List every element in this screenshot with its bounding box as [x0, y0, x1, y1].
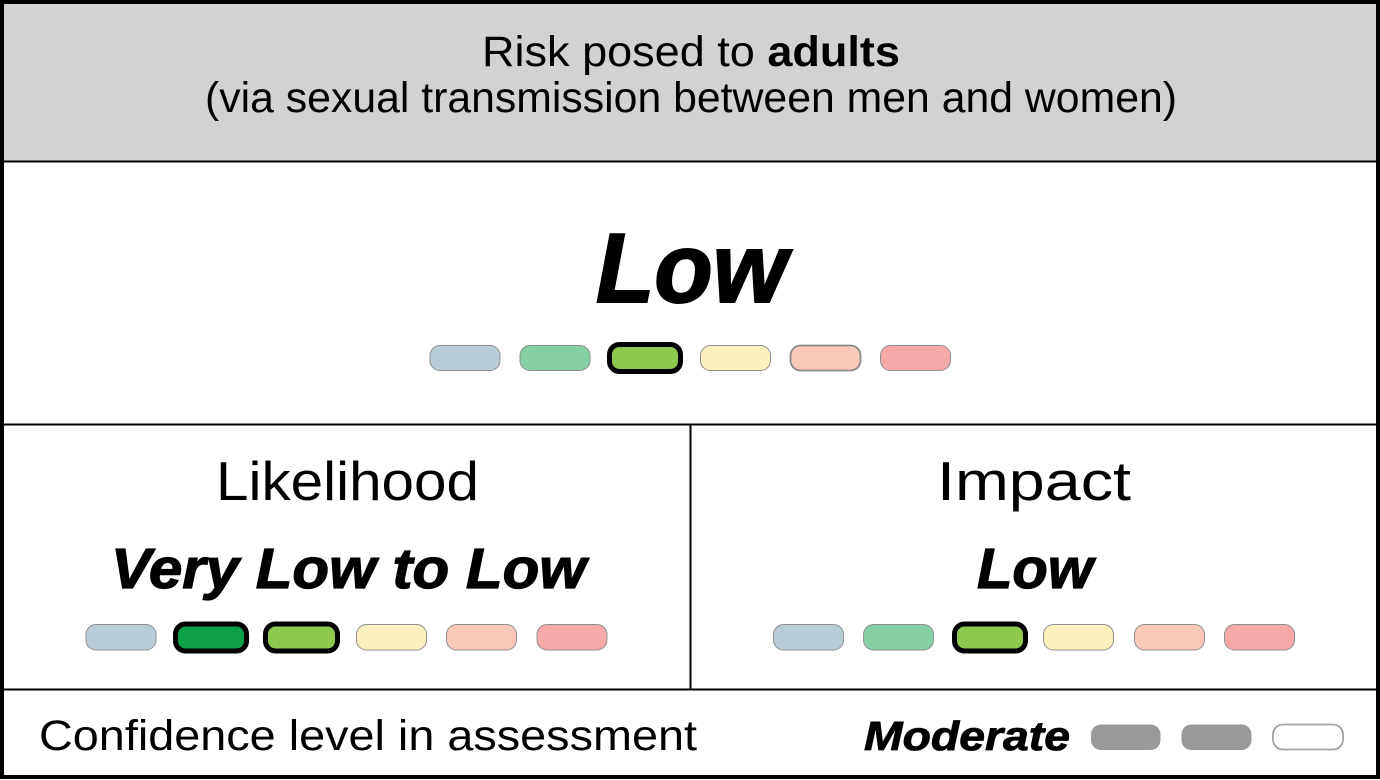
overall risk rating: Low — [596, 213, 793, 323]
confidence scale — [1091, 724, 1343, 750]
panel: confidence — [39, 712, 1343, 760]
header band — [3, 3, 1377, 161]
panel: impact — [774, 450, 1294, 651]
impact rating: Low — [977, 537, 1097, 601]
impact scale — [774, 624, 1294, 651]
confidence label: Confidence level in assessment — [39, 712, 697, 760]
likelihood rating: Very Low to Low — [111, 537, 590, 601]
panel: overall risk — [430, 213, 950, 372]
impact heading: Impact — [937, 450, 1131, 512]
likelihood heading: Likelihood — [216, 450, 479, 512]
likelihood scale — [86, 624, 607, 651]
confidence rating: Moderate — [864, 713, 1070, 759]
overall risk scale — [430, 344, 950, 372]
header line one: Risk posed to adults — [482, 28, 900, 76]
header line two: (via sexual transmission between men and women) — [205, 74, 1177, 122]
panel: likelihood — [86, 450, 607, 651]
